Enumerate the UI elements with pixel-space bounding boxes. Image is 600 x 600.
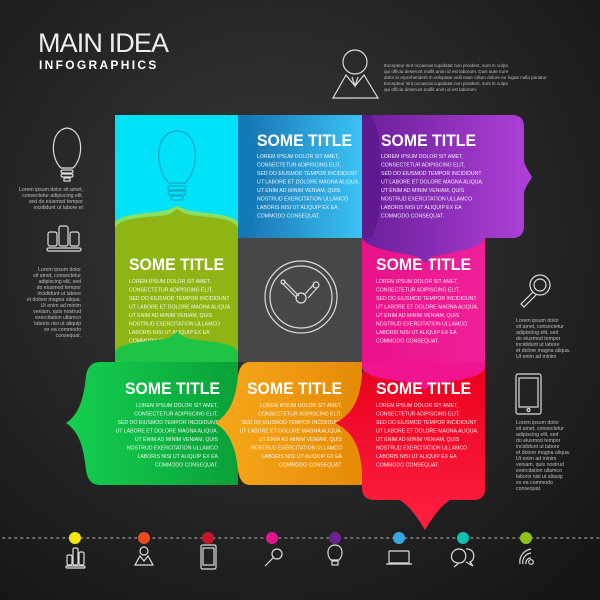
text block: left 2: do eiusmod tempor [37,285,81,291]
panel: lime: UT LABORE ET DOLORE MAGNA ALIQUA. [129,304,231,310]
text block: right 1: et dolore magna aliqua. [516,348,570,354]
text block: left 1: incididunt ut labore et [34,205,84,211]
text block: left 2: ex ea commodo [44,327,81,333]
text block: right 2: veniam, quis nostrud [516,462,564,468]
text block: right 2: sit amet, consectetur [516,426,564,432]
panel: lime: LOREM IPSUM DOLOR SIT AMET, [129,279,211,285]
panel: lime: SOME TITLE [129,256,224,274]
panel: orange: LOREM IPSUM DOLOR SIT AMET, [260,403,342,409]
text block: top right: dolor in reprehenderit in voluptate velit esse cillum dolore eu fugiat nulla pariatur. [384,75,548,80]
text block: right 2: do eiusmod tempor [516,438,561,444]
panel: purple [362,115,532,263]
panel: red: LABORIS NISI UT ALIQUIP EX EA [376,454,457,460]
panel: red: SOME TITLE [376,380,471,398]
panel: red: COMMODO CONSEQUAT. [376,462,439,468]
text block: right 1: sit amet, consectetur [516,324,564,330]
panel: lime: NOSTRUD EXERCITATION ULLAMCO [129,322,220,328]
panel: magenta: SOME TITLE [376,256,471,274]
panel: blue: LOREM IPSUM DOLOR SIT AMET, [257,154,339,160]
panel: blue: UT LABORE ET DOLORE MAGNA ALIQUA. [257,180,359,186]
panel: blue: COMMODO CONSEQUAT. [257,214,320,220]
text block: right 2: exercitation ullamco [516,468,562,474]
panel: blue: CONSECTETUR ADIPISCING ELIT, [257,162,341,168]
text block: right 2: ex ea commodo [516,480,553,486]
panel: purple: UT LABORE ET DOLORE MAGNA ALIQUA. [381,180,483,186]
panel: blue [238,115,364,238]
panel: magenta: LOREM IPSUM DOLOR SIT AMET, [376,279,458,285]
panel: red: SED DO EIUSMOD TEMPOR INCIDIDUNT [376,420,477,426]
text block: left 2: adipiscing elit, sed [39,279,81,285]
panel: magenta: NOSTRUD EXERCITATION ULLAMCO [376,322,467,328]
icon: bar chart left [47,226,81,251]
panel: purple: SED DO EIUSMOD TEMPOR INCIDIDUNT [381,171,482,177]
panel: center clock [238,238,362,362]
text block: right 2: et dolore magna aliqua. [516,450,570,456]
text block: right 2: incididunt ut labore [516,444,560,450]
panel: green: LABORIS NISI UT ALIQUIP EX EA [137,454,219,460]
text block: left 1: sed do eiusmod tempor [29,199,83,205]
text block: right 1: adipiscing elit, sed [516,330,559,336]
panel: orange: NOSTRUD EXERCITATION ULLAMCO [251,446,342,452]
text block: left 1: consectetur adipiscing elit, [22,193,83,199]
panel: magenta: CONSECTETUR ADIPISCING ELIT, [376,288,460,294]
panel: blue: NOSTRUD EXERCITATION ULLAMCO [257,196,348,202]
panel: purple: LOREM IPSUM DOLOR SIT AMET, [381,154,463,160]
timeline icons [66,545,533,569]
panel: orange: COMMODO CONSEQUAT. [279,462,342,468]
panel: purple: SOME TITLE [381,132,476,150]
text block: left 1 [19,187,84,211]
panel: red: UT LABORE ET DOLORE MAGNA ALIQUA. [376,428,478,434]
text block: top right: Excepteur sint occaecat cupidatat non proident, sunt in culpa [384,81,508,86]
text block: top right: Excepteur sint occaecat cupidatat non proident, sunt in culpa [384,63,508,68]
text block: left 2: Ut enim ad minim [41,303,81,309]
panel: cyan with bulb [115,115,238,238]
text block: right 1: Ut enim ad minim [516,354,556,360]
text block: top right: qui officia deserunt mollit anim id est laborum. [384,87,477,92]
text block: right 1: do eiusmod tempor [516,336,561,342]
title: MAIN IDEA [38,28,169,58]
panel: purple: COMMODO CONSEQUAT. [381,214,444,220]
panel: blue: UT ENIM AD MINIM VENIAM, QUIS [257,188,341,194]
panel: orange: UT LABORE ET DOLORE MAGNA ALIQUA. [240,428,342,434]
panel: green: SED DO EIUSMOD TEMPOR INCIDIDUNT [118,420,219,426]
panel: orange: CONSECTETUR ADIPISCING ELIT, [258,412,342,418]
title: INFOGRAPHICS [39,58,159,72]
timeline dots [69,532,532,544]
panel: magenta: LABORIS NISI UT ALIQUIP EX EA [376,330,457,336]
panel: lime: UT ENIM AD MINIM VENIAM, QUIS [129,313,213,319]
panel: lime: SED DO EIUSMOD TEMPOR INCIDIDUNT [129,296,230,302]
text block: right 1: incididunt ut labore [516,342,560,348]
panel: blue: SED DO EIUSMOD TEMPOR INCIDIDUNT [257,171,358,177]
panel: purple: UT ENIM AD MINIM VENIAM, QUIS [381,188,465,194]
panel: lime: LABORIS NISI UT ALIQUIP EX EA [129,330,210,336]
text block: right 2: consequat. [516,486,541,492]
text block: left 2 [27,267,81,339]
text block: left 2: laboris nisi ut aliquip [34,321,81,327]
panel: green: COMMODO CONSEQUAT. [155,462,218,468]
text block: right 2 [516,420,570,492]
panel: orange: LABORIS NISI UT ALIQUIP EX EA [261,454,343,460]
panel: red: NOSTRUD EXERCITATION ULLAMCO [376,446,467,452]
text block: left 1: Lorem ipsum dolor sit amet, [19,187,83,193]
panel: red: LOREM IPSUM DOLOR SIT AMET, [376,403,458,409]
panel: green: CONSECTETUR ADIPISCING ELIT, [134,412,218,418]
text block: right 2: Ut enim ad minim [516,456,556,462]
panel: green: SOME TITLE [125,380,220,398]
text block: right 2: Lorem ipsum dolor [516,420,559,426]
text block: left 2: et dolore magna aliqua. [27,297,81,303]
panel: magenta: COMMODO CONSEQUAT. [376,338,439,344]
panel: green: NOSTRUD EXERCITATION ULLAMCO [127,446,218,452]
panel: lime: COMMODO CONSEQUAT. [129,338,192,344]
text block: right 1: Lorem ipsum dolor [516,318,559,324]
icon: bulb left [53,128,81,181]
panel: orange: SED DO EIUSMOD TEMPOR INCIDIDUNT [242,420,343,426]
text block: left 2: sit amet, consectetur [33,273,81,279]
text block: left 2: consequat. [56,333,81,339]
panel: red: UT ENIM AD MINIM VENIAM, QUIS [376,437,460,443]
panel: green [66,362,238,485]
icon: person top [333,50,378,98]
timeline dotted line [3,537,600,539]
panel: green: UT ENIM AD MINIM VENIAM, QUIS [135,437,219,443]
panel: green: UT LABORE ET DOLORE MAGNA ALIQUA. [116,428,218,434]
panel: blue: SOME TITLE [257,132,352,150]
text block: top right: qui officia deserunt mollit anim id est laborum. Duis aute irure [384,69,509,74]
text block: left 2: incididunt ut labore [37,291,81,297]
panel: magenta: UT LABORE ET DOLORE MAGNA ALIQUA. [376,304,478,310]
text block: right 1 [516,318,570,360]
panel: magenta: SED DO EIUSMOD TEMPOR INCIDIDUNT [376,296,477,302]
panel: lime: CONSECTETUR ADIPISCING ELIT, [129,288,213,294]
panel: blue: LABORIS NISI UT ALIQUIP EX EA [257,205,338,211]
text block: top right [384,63,548,92]
panel: orange [215,362,362,485]
panel: orange: UT ENIM AD MINIM VENIAM, QUIS [259,437,343,443]
panel: green: LOREM IPSUM DOLOR SIT AMET, [136,403,218,409]
icon: tablet right [516,374,541,414]
text block: left 2: veniam, quis nostrud [33,309,81,315]
panel: red [335,362,485,530]
text block: left 2: exercitation ullamco [35,315,81,321]
icon: magnifier right [521,275,550,307]
title [38,28,169,72]
panel: red: CONSECTETUR ADIPISCING ELIT, [376,412,460,418]
panel: purple: LABORIS NISI UT ALIQUIP EX EA [381,205,462,211]
text block: right 2: laboris nisi ut aliquip [516,474,563,480]
panel: magenta [362,238,485,368]
text block: left 2: Lorem ipsum dolor [38,267,81,273]
panel: lime [115,238,238,362]
panel: purple: CONSECTETUR ADIPISCING ELIT, [381,162,465,168]
text block: right 2: adipiscing elit, sed [516,432,559,438]
panel: purple: NOSTRUD EXERCITATION ULLAMCO [381,196,472,202]
panel: orange: SOME TITLE [247,380,342,398]
panel: magenta: UT ENIM AD MINIM VENIAM, QUIS [376,313,460,319]
